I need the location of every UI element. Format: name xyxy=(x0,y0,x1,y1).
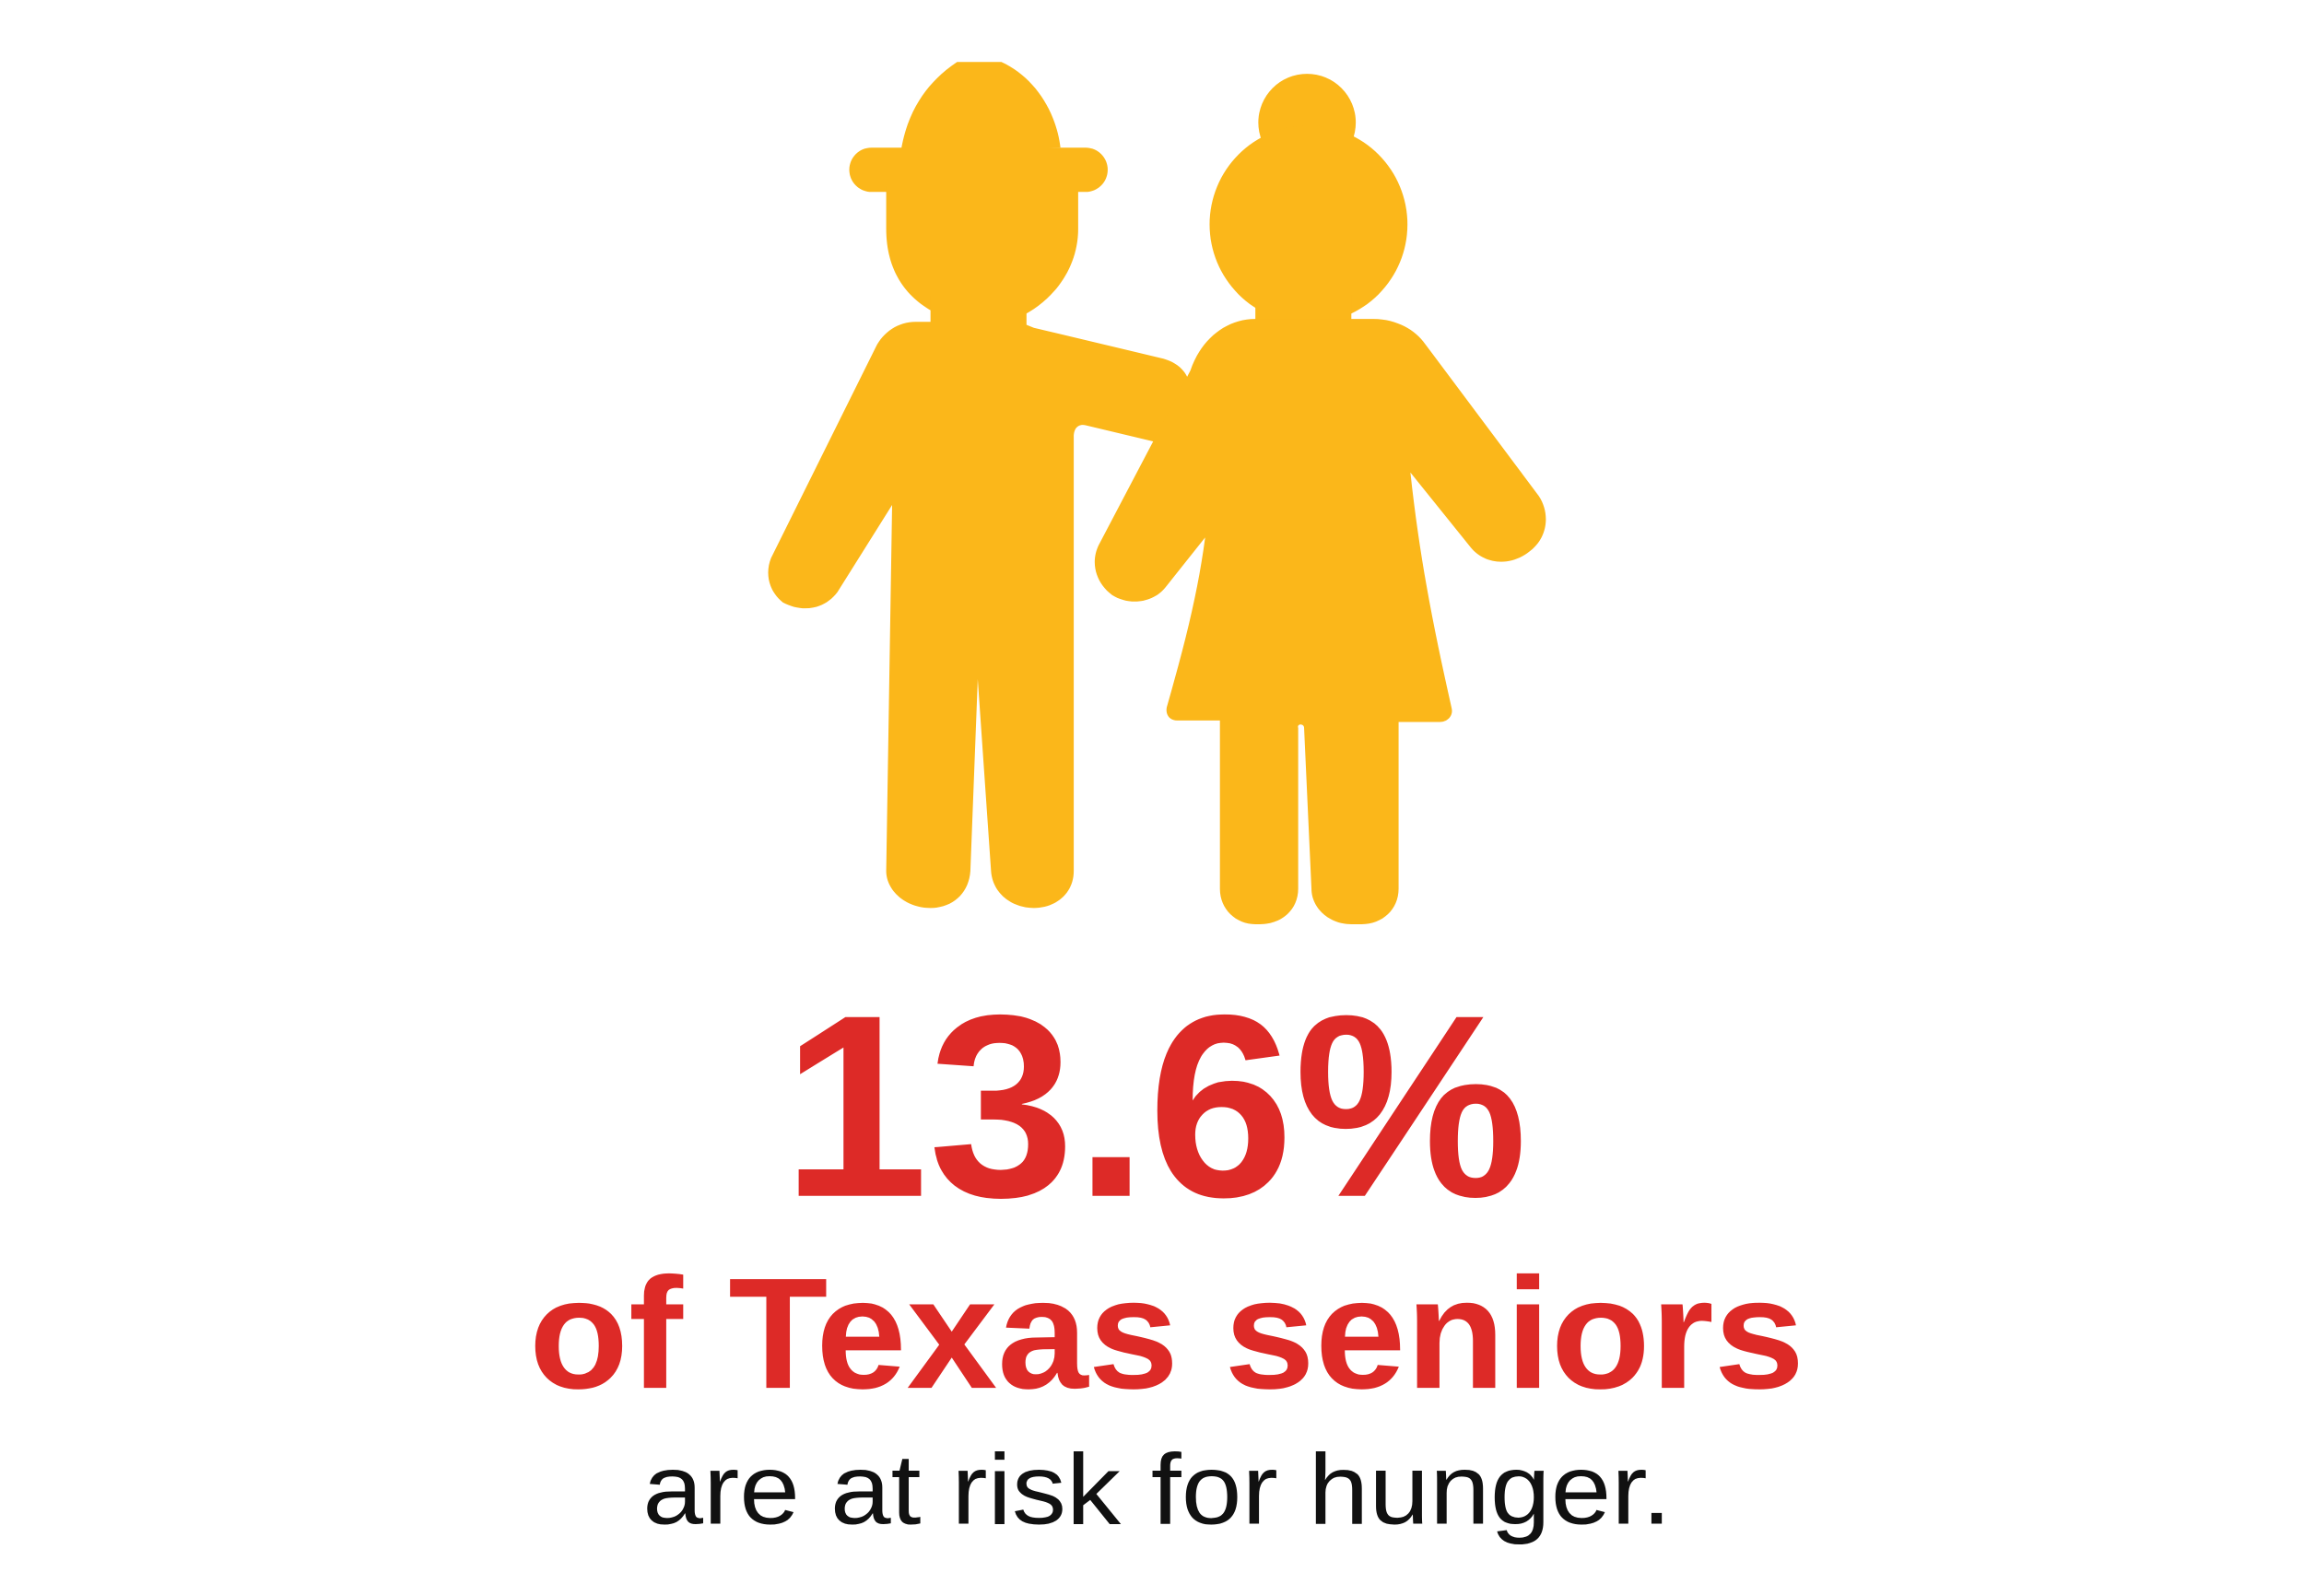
icon: senior couple xyxy=(769,62,1546,924)
heading: of Texas seniors: of Texas seniors xyxy=(529,1246,1804,1422)
statistic: 13.6%: 13.6% xyxy=(782,961,1528,1251)
icon: woman with bun xyxy=(1095,74,1546,924)
subtext: are at risk for hunger: are at risk for hunger. xyxy=(642,1433,1672,1545)
icon: man with hat xyxy=(769,62,1189,908)
